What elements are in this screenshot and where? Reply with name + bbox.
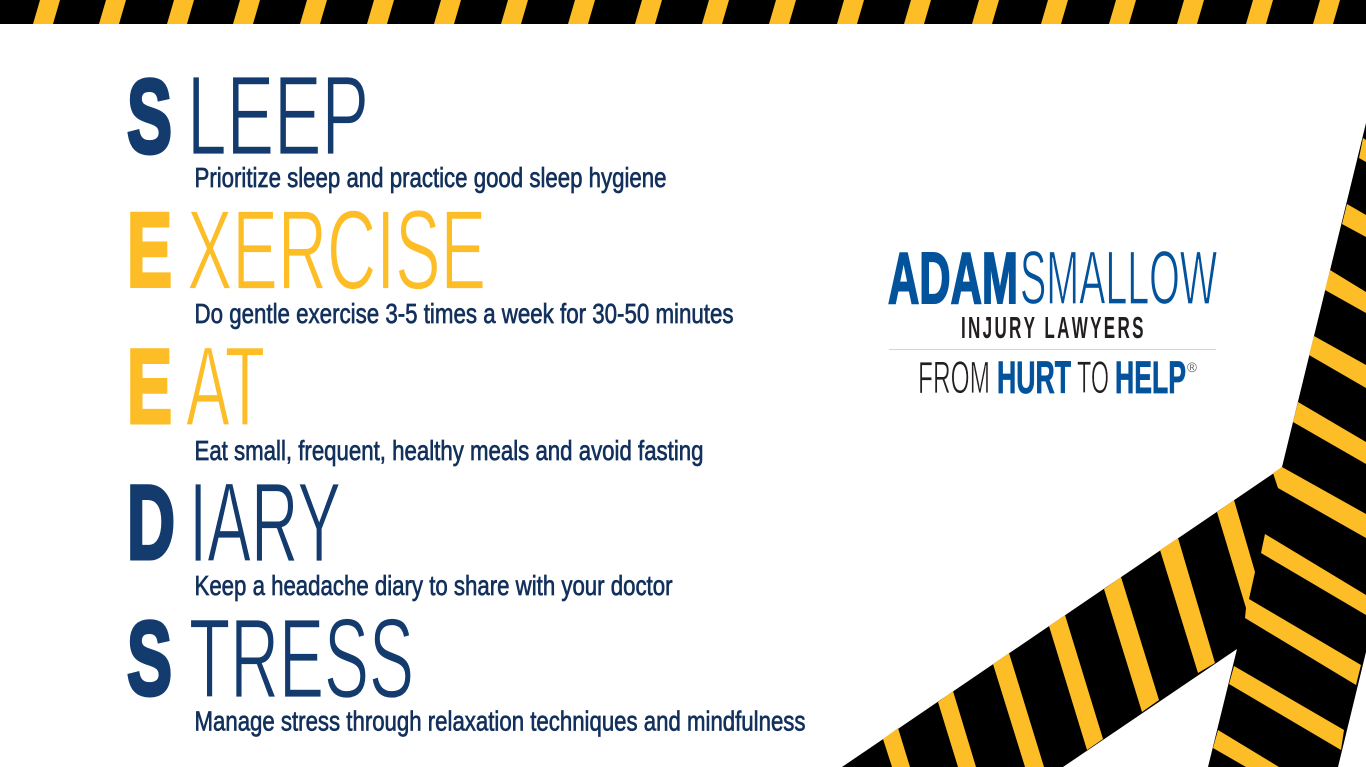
row: diary: Keep a headache diary to share with your doctor — [194, 570, 672, 601]
logo — [888, 236, 1217, 403]
logo wordmark — [888, 236, 1217, 321]
row: stress — [127, 596, 806, 736]
row: sleep: Prioritize sleep and practice good sleep hygiene — [194, 162, 666, 193]
row: sleep: S — [127, 58, 172, 176]
row: exercise: Do gentle exercise 3-5 times a week for 30-50 minutes — [194, 298, 734, 329]
hazard tape ribbon — [842, 123, 1366, 767]
logo subtitle: INJURY LAWYERS — [961, 311, 1146, 345]
row: stress: TRESS — [189, 596, 414, 722]
row: eat: Eat small, frequent, healthy meals and avoid fasting — [194, 435, 704, 466]
row: eat — [127, 324, 704, 466]
row: sleep: LEEP — [187, 52, 369, 178]
row: stress: S — [127, 600, 172, 718]
logo tagline: FROM — [918, 352, 990, 403]
row: diary: IARY — [189, 460, 341, 586]
row: exercise: XERCISE — [187, 187, 486, 313]
top hazard stripe bar — [0, 0, 1366, 24]
logo tagline: HURT — [997, 352, 1071, 403]
row: sleep — [127, 52, 666, 193]
row: stress: Manage stress through relaxation techniques and mindfulness — [194, 706, 806, 736]
row: diary: D — [127, 464, 175, 582]
row: diary — [127, 460, 672, 601]
logo wordmark: ADAM — [888, 239, 1018, 319]
row: eat: E — [127, 328, 172, 446]
row: exercise: E — [127, 192, 172, 309]
row: eat: AT — [186, 324, 265, 450]
logo tagline: TO — [1077, 352, 1109, 403]
logo divider — [889, 349, 1216, 350]
logo tagline — [918, 352, 1197, 403]
logo tagline: HELP — [1115, 352, 1186, 403]
logo tagline: ® — [1187, 360, 1197, 375]
